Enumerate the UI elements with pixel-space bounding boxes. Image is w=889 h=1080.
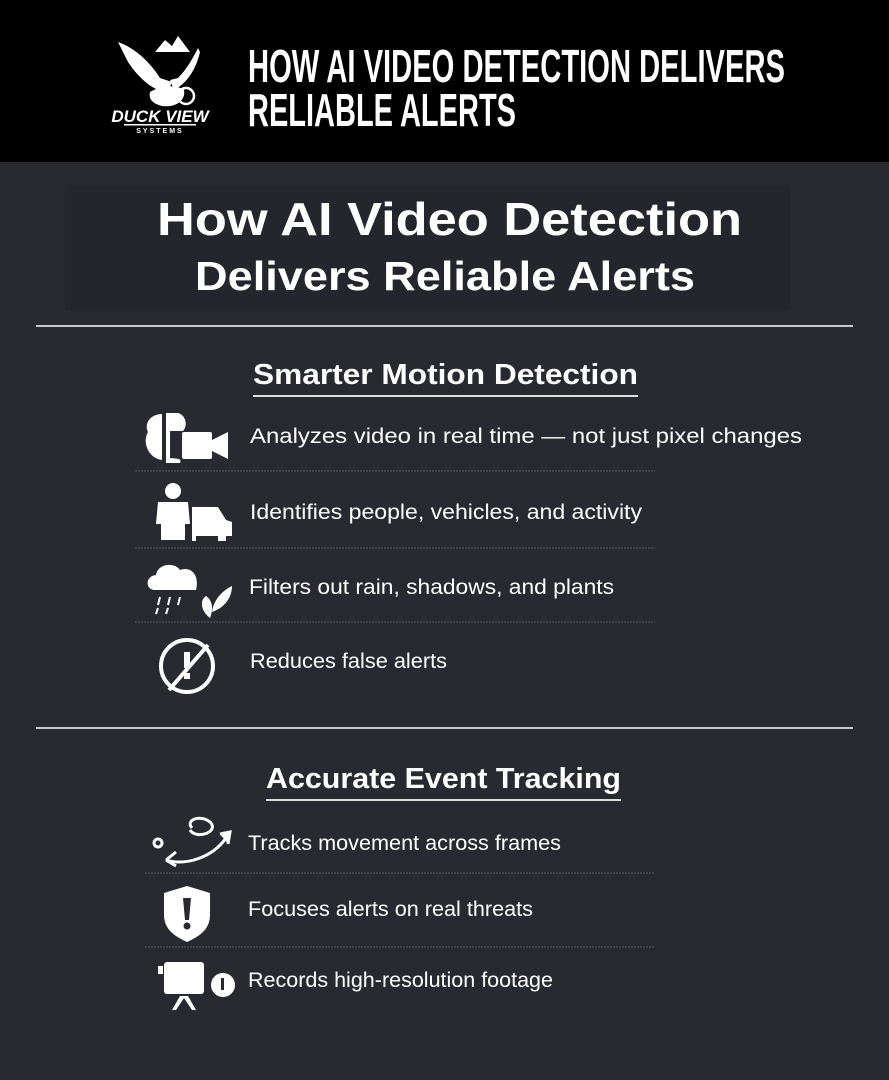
item: filters out rain <box>148 565 614 618</box>
icon: person and car <box>156 483 232 541</box>
item: identifies people: Identifies people, vehicles, and activity <box>250 501 643 524</box>
icon: brain camera <box>146 413 228 463</box>
item: filters out rain: Filters out rain, shadows, and plants <box>249 576 614 599</box>
logo: Duck View Systems <box>111 36 211 135</box>
item: records footage <box>158 962 553 1010</box>
main title <box>65 185 790 310</box>
logo: Duck View Systems: DUCK VIEW <box>111 107 211 126</box>
item: focuses alerts <box>164 886 533 942</box>
icon: no alert <box>161 640 213 692</box>
header bar <box>0 0 889 162</box>
item: focuses alerts: Focuses alerts on real threats <box>248 898 533 921</box>
main title: How AI Video Detection <box>157 193 742 245</box>
heading: Smarter Motion Detection: Smarter Motion Detection <box>253 359 638 391</box>
item: analyzes video <box>146 413 802 463</box>
item: reduces false alerts <box>161 640 447 692</box>
item: analyzes video: Analyzes video in real time — not just pixel changes <box>250 425 802 448</box>
icon: cloud rain leaf <box>148 565 232 618</box>
main title: Delivers Reliable Alerts <box>195 253 695 299</box>
logo: Duck View Systems: SYSTEMS <box>136 128 184 135</box>
panel: accurate event tracking <box>145 763 655 1010</box>
icon: shield alert <box>164 886 210 942</box>
heading: Accurate Event Tracking: Accurate Event Tracking <box>266 763 621 795</box>
item: tracks movement <box>154 818 561 866</box>
header title: RELIABLE ALERTS <box>248 84 516 136</box>
item: records footage: Records high-resolution footage <box>248 969 553 992</box>
header title <box>248 40 785 136</box>
item: tracks movement: Tracks movement across frames <box>248 832 561 855</box>
icon: camera recorder <box>158 962 235 1010</box>
item: reduces false alerts: Reduces false alerts <box>250 650 447 673</box>
panel: smarter motion detection <box>135 359 802 692</box>
icon: path arrows <box>154 818 230 866</box>
item: identifies people <box>156 483 643 541</box>
